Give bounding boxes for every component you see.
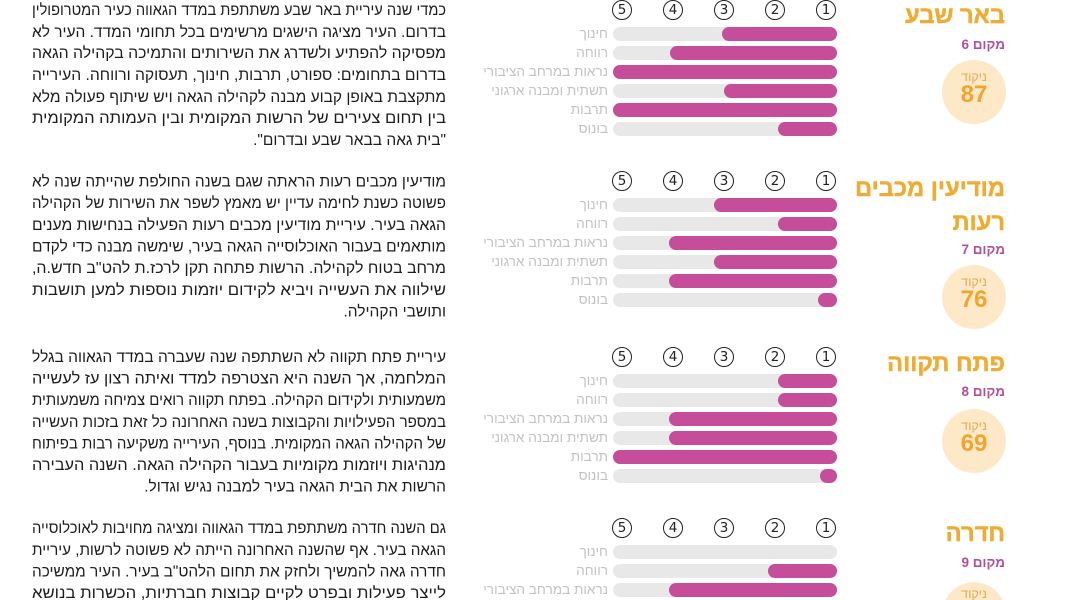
text block: Modiin Maccabim Reut [32,174,446,320]
heading: Modiin Maccabim Reut [855,176,1005,236]
text block: Hadera [32,520,446,600]
bar chart: Petah Tikva [483,347,837,483]
text block: Petah Tikva: המלחמה, אך השנה היא הצטרפה למדד ואיתה רצון עז לעשייה [32,370,446,388]
bar chart: Hadera: 3 [720,520,728,536]
text block: Petah Tikva: במספר הפעילויות והקבוצות בשנה האחרונה כל זאת בזכות העשייה [32,414,446,431]
text block: Beer Sheva: בין תחום צעירים של הרשות המקומית ובין העמותה המקומית [32,110,446,127]
text block: Modiin Maccabim Reut: הגאה בעיר. עיריית מודיעין מכבים רעות הפעילה בנחישות מענים [32,217,446,234]
bar chart: Hadera: נראות במרחב הציבורי [483,582,608,597]
bar chart: Modiin Maccabim Reut: 2 [771,173,779,189]
bar chart: Beer Sheva: נראות במרחב הציבורי [483,64,608,79]
heading: Modiin Maccabim Reut: רעות [953,210,1005,236]
heading: Hadera: חדרה [946,521,1005,547]
text block: Petah Tikva: עיריית פתח תקווה לא השתתפה שנה שעברה במדד הגאווה בגלל [32,349,446,366]
bar chart: Modiin Maccabim Reut: 4 [669,173,677,189]
text block: Beer Sheva: מתקצבת באופן קבוע מבנה לקהילה הגאה ויש שיתוף פעולה מלא [32,89,446,106]
bar chart: Beer Sheva: 4 [669,2,677,18]
bar chart: Petah Tikva: נראות במרחב הציבורי [483,411,608,426]
text block: Beer Sheva: "בית גאה בבאר שבע ובדרום". [253,132,446,149]
heading: Beer Sheva: באר שבע [905,3,1005,29]
bar chart: Modiin Maccabim Reut: חינוך [579,197,608,212]
bar chart: Modiin Maccabim Reut: 3 [720,173,728,189]
bar chart: Petah Tikva: בונוס [579,468,608,483]
text block: Modiin Maccabim Reut: שילווה את העשייה ויביא לקידום יוזמות נוספות למען תושבות [32,282,446,299]
text block: Modiin Maccabim Reut: מותאמים בעבור האוכלוסייה הגאה בעיר, שימשה מבנה כדי לקדם [32,238,446,256]
bar chart: Beer Sheva: 5 [618,2,626,18]
score badge: Modiin Maccabim Reut: ניקוד [961,275,987,289]
text block: Modiin Maccabim Reut: פשוטה כשנת לחימה עדיין יש מאמץ לשפר את השירות של הקהילה [32,195,446,212]
bar chart: Beer Sheva: 3 [720,2,728,18]
bar chart: Beer Sheva: 2 [771,2,779,18]
text block: Hadera: חדרה גאה להמשיך ולחזק את תחום הלהט"ב בעיר. העיר ממשיכה [32,564,446,580]
bar chart: Petah Tikva: חינוך [579,373,608,388]
text block: Hadera: הגאה בעיר. אף שהשנה האחרונה הייתה לא פשוטה לרשות, עיריית [32,542,446,559]
bar chart: Petah Tikva: 5 [618,349,626,365]
bar chart: Modiin Maccabim Reut: 1 [822,173,830,189]
rank: Hadera: מקום 9 [961,555,1005,570]
text block: Modiin Maccabim Reut: מרחב בטוח לקהילה. הרשות פתחה תקן לרכז.ת להט"ב חדש.ה, [32,260,446,277]
bar chart: Hadera: חינוך [579,544,608,559]
score badge: Petah Tikva: ניקוד [961,419,987,433]
text block: Beer Sheva: בדרום בתחומים: ספורט, תרבות, חינוך, תעסוקה ורווחה. העירייה [32,67,446,84]
bar chart: Petah Tikva: 2 [771,349,779,365]
bar chart: Petah Tikva: תשתית ומבנה ארגוני [491,430,608,445]
heading: Modiin Maccabim Reut: מודיעין מכבים [855,176,1005,202]
score badge: Beer Sheva: 87 [961,81,987,108]
bar chart: Modiin Maccabim Reut [483,171,837,307]
score badge: Hadera (cropped by page edge) [942,582,1006,600]
text block: Modiin Maccabim Reut: ותושבי הקהילה. [343,304,446,320]
text block: Petah Tikva: הרשות את הבית הגאה בעיר למבנה נגיש וגדול. [144,478,446,496]
bar chart: Hadera: 1 [822,520,830,536]
bar chart: Petah Tikva: 4 [669,349,677,365]
score badge: Petah Tikva: 69 [961,430,987,457]
bar chart: Petah Tikva: רווחה [576,392,608,407]
bar chart: Modiin Maccabim Reut: תשתית ומבנה ארגוני [491,254,608,269]
bar chart: Petah Tikva: 3 [720,349,728,365]
bar chart: Petah Tikva: 1 [822,349,830,365]
rank: Petah Tikva: מקום 8 [961,384,1005,399]
bar chart: Beer Sheva: תרבות [571,102,608,117]
score badge: Modiin Maccabim Reut: 76 [961,286,987,313]
score badge: Beer Sheva: ניקוד [961,70,987,84]
text block: Modiin Maccabim Reut: מודיעין מכבים רעות הראתה שגם בשנה החולפת שהייתה שנה לא [32,174,446,190]
bar chart: Hadera: 5 [618,520,626,536]
bar chart: Modiin Maccabim Reut: 5 [618,173,626,189]
heading: Petah Tikva: פתח תקווה [887,351,1005,377]
text block: Petah Tikva [32,349,446,496]
text block: Beer Sheva [32,2,446,149]
bar chart: Hadera [483,518,837,597]
bar chart: Beer Sheva [483,0,837,136]
rank: Beer Sheva: מקום 6 [961,37,1005,52]
bar chart: Modiin Maccabim Reut: בונוס [579,292,608,307]
bar chart: Hadera: 2 [771,520,779,536]
text block: Beer Sheva: מפסיקה להפתיע ולשדרג את השירותים והתמיכה בקהילה הגאה [32,45,446,62]
bar chart: Hadera: 4 [669,520,677,536]
bar chart: Beer Sheva: בונוס [579,121,608,136]
bar chart: Beer Sheva: רווחה [576,45,608,60]
bar chart: Modiin Maccabim Reut: רווחה [576,216,608,231]
bar chart: Modiin Maccabim Reut: נראות במרחב הציבורי [483,235,608,250]
bar chart: Hadera: רווחה [576,563,608,578]
bar chart: Beer Sheva: 1 [822,2,830,18]
bar chart: Modiin Maccabim Reut: תרבות [571,273,608,288]
text block: Beer Sheva: בדרום. העיר מציגה הישגים מרשימים בכל תחומי המדד. העיר לא [32,24,446,41]
text block: Petah Tikva: מנהיגות ויוזמות מקומיות בעבור הקהילה הגאה. השנה העבירה [32,457,446,474]
score badge: Modiin Maccabim Reut [942,265,1006,329]
score badge: Beer Sheva [942,60,1006,124]
bar chart: Petah Tikva: תרבות [571,449,608,464]
rank: Modiin Maccabim Reut: מקום 7 [961,242,1005,257]
bar chart: Beer Sheva: תשתית ומבנה ארגוני [491,83,608,98]
score badge: Petah Tikva [942,409,1006,473]
bar chart: Beer Sheva: חינוך [579,26,608,41]
